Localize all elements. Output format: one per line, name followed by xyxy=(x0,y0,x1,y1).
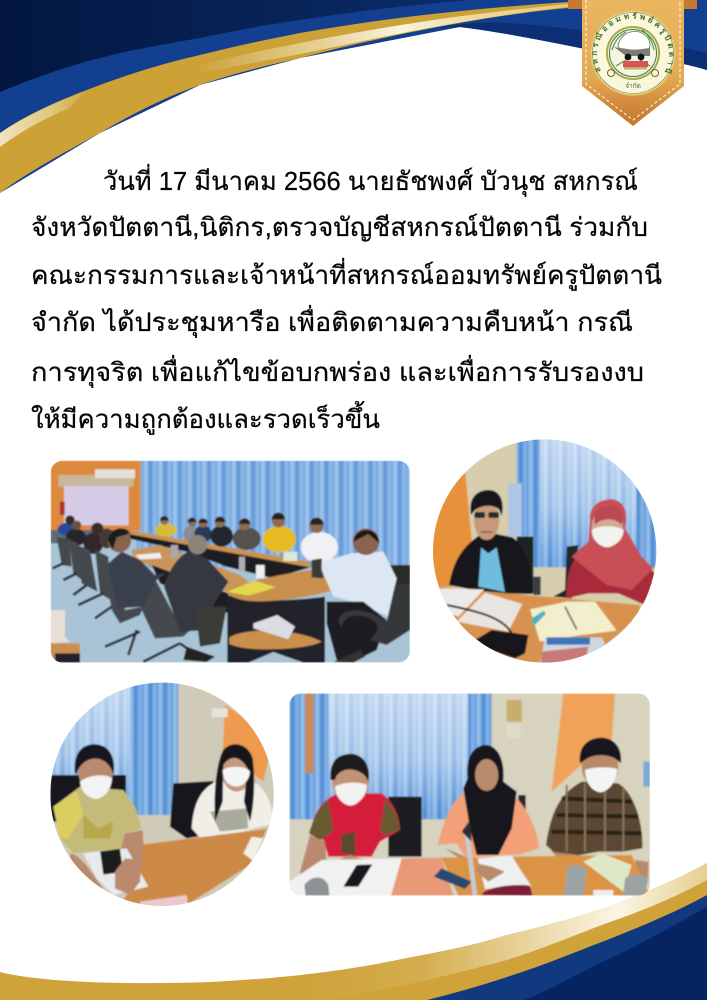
footer wave xyxy=(0,863,707,1000)
far table xyxy=(128,530,310,568)
ribbon badge xyxy=(568,0,697,126)
body text: คณะกรรมการและเจ้าหน้าที่สหกรณ์ออมทรัพย์ครูปัตตานี xyxy=(31,258,662,291)
person middle xyxy=(437,744,540,858)
photo: two officials xyxy=(432,437,660,663)
person right xyxy=(566,499,655,605)
table xyxy=(120,829,267,905)
right man xyxy=(322,552,397,617)
cooperative seal: จำกัด xyxy=(625,82,641,90)
body text: จำกัด ได้ประชุมหารือ เพื่อติดตามความคืบหน้า กรณี xyxy=(31,305,633,338)
person right xyxy=(546,738,648,882)
photo: two officials at table xyxy=(47,682,277,908)
far-side attendees xyxy=(58,513,338,563)
left chairs xyxy=(56,537,190,640)
person right xyxy=(190,743,272,838)
header wave xyxy=(0,0,707,193)
table xyxy=(438,587,640,663)
body text: ให้มีความถูกต้องและรวดเร็วขึ้น xyxy=(31,401,380,435)
person left xyxy=(53,744,144,892)
cooperative seal: สหกรณ์ออมทรัพย์ครูปัตตานี xyxy=(592,12,674,74)
near suit men xyxy=(108,552,167,608)
body text xyxy=(31,164,662,435)
person left xyxy=(300,754,400,885)
ribbon flaps xyxy=(568,0,697,9)
ribbon body xyxy=(582,0,684,126)
body text: วันที่ 17 มีนาคม 2566 นายธัชพงศ์ บัวนุช สหกรณ์ xyxy=(103,164,638,197)
left table xyxy=(132,545,248,592)
body text: จังหวัดปัตตานี,นิติกร,ตรวจบัญชีสหกรณ์ปัตตานี ร่วมกับ xyxy=(31,213,648,242)
body text: การทุจริต เพื่อแก้ไขข้อบกพร่อง และเพื่อการรับรองงบ xyxy=(31,355,644,388)
table xyxy=(289,858,402,896)
foreground table xyxy=(51,643,80,663)
photo: three staff members xyxy=(289,693,650,896)
person left xyxy=(449,490,532,594)
stitching xyxy=(586,0,680,120)
curved table xyxy=(227,595,325,663)
photo: meeting room xyxy=(51,461,410,663)
